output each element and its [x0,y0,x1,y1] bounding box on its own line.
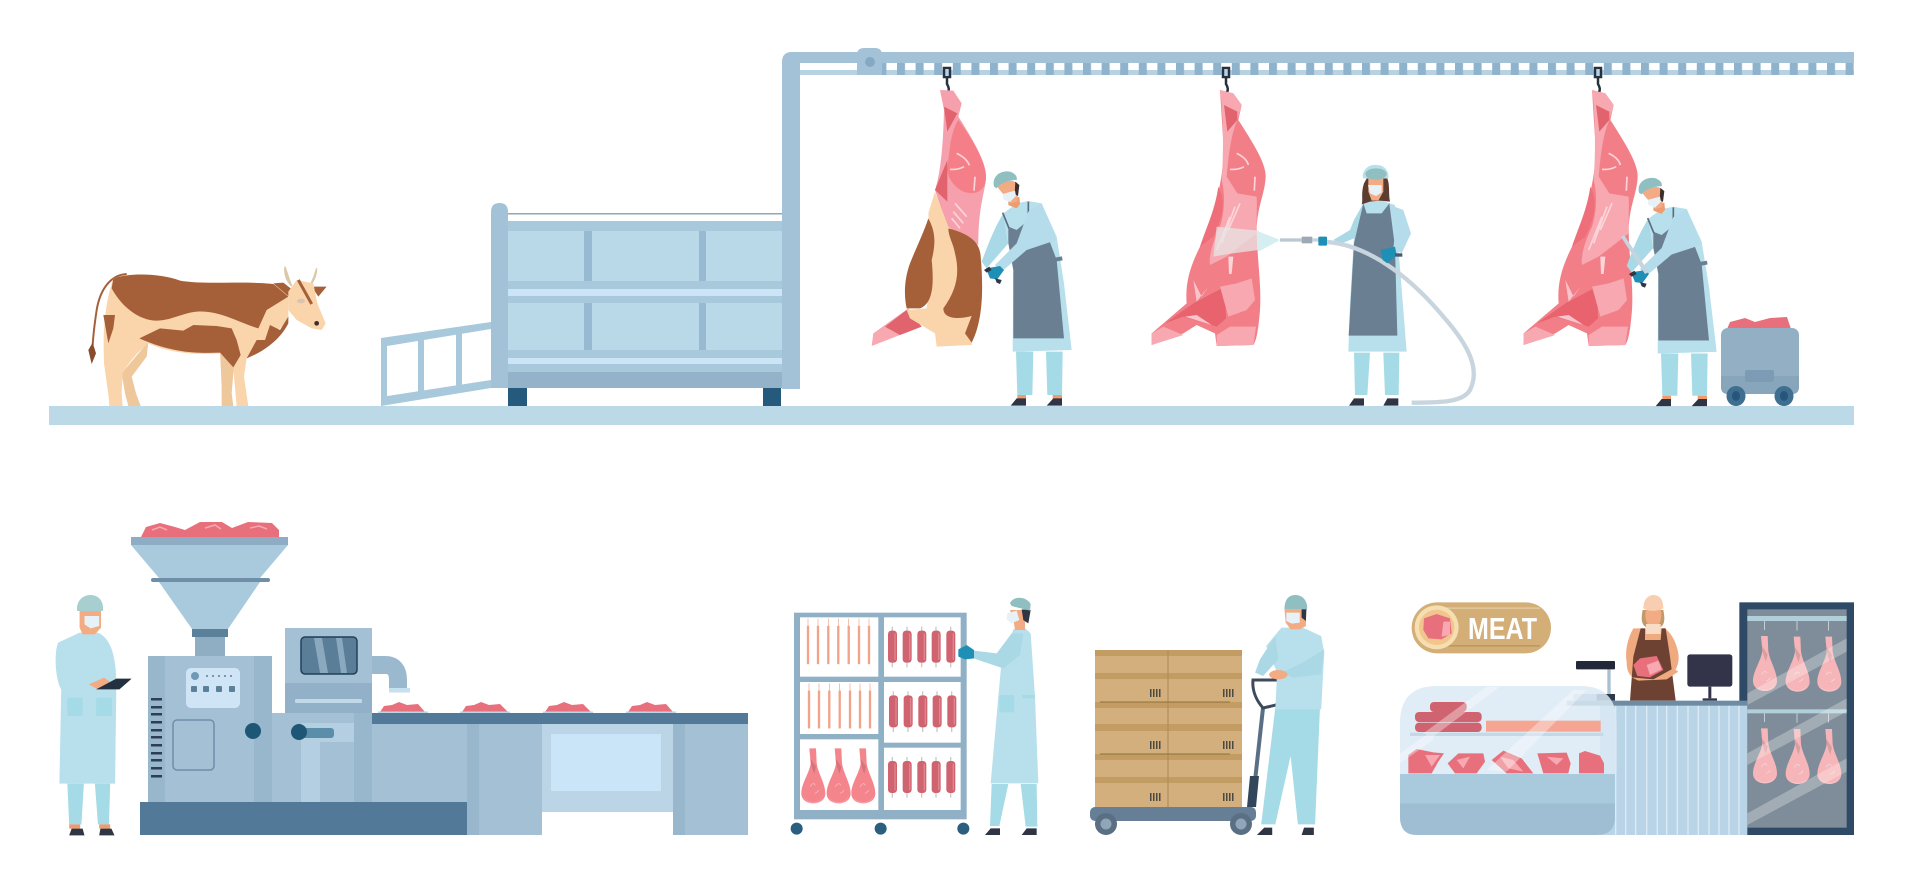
carcass with hide [872,90,986,347]
worker at rack [958,598,1038,835]
barcodes [1150,689,1234,801]
worker with knife [982,171,1072,406]
thin sausages [807,619,871,728]
carcass being cut [1524,90,1638,346]
hose [1323,242,1474,403]
meat cuts [1408,749,1604,773]
pallet truck [1090,680,1287,835]
hook three [1594,68,1601,94]
fridge with hams [1739,602,1854,835]
icon: cow [88,267,327,406]
shop counter [1400,595,1854,835]
conveyor table [372,724,467,802]
sign text: MEAT [1468,611,1537,646]
loading ramp [381,322,491,406]
upper cabinet with screen [285,628,372,683]
hook two [1222,68,1229,94]
second unit [272,713,372,802]
control panel [186,668,240,708]
worker pushing pallet truck [1255,595,1324,835]
thick sausages [888,627,956,798]
outlet spout [372,665,398,688]
icon: rail trolley [857,48,882,75]
hopper [131,537,288,656]
hook one [943,68,950,94]
machine body [148,656,272,802]
carcass being washed [1152,90,1266,346]
meat portions on conveyor [378,702,676,713]
meat cart [1721,317,1799,406]
worker with tablet [56,595,132,835]
floor of the slaughter line [49,406,1854,425]
display case [1400,686,1617,835]
water spray [1213,227,1280,257]
pallet of boxes [1095,650,1242,807]
shopkeeper [1626,595,1679,701]
worker with knife by the cart [1621,178,1717,406]
vents [151,698,162,778]
counter front [1567,701,1747,835]
sausage machine [131,522,748,835]
meat sign [1412,602,1551,653]
register monitor [1687,654,1732,701]
hams on rack [801,748,875,803]
sausage rings [1415,702,1482,732]
overhead rail and post [782,48,1854,389]
scale [1573,661,1615,701]
smoking rack [791,613,969,835]
worker with hose [1213,165,1474,406]
minced meat in hopper [141,522,279,537]
holding pen [491,203,782,406]
